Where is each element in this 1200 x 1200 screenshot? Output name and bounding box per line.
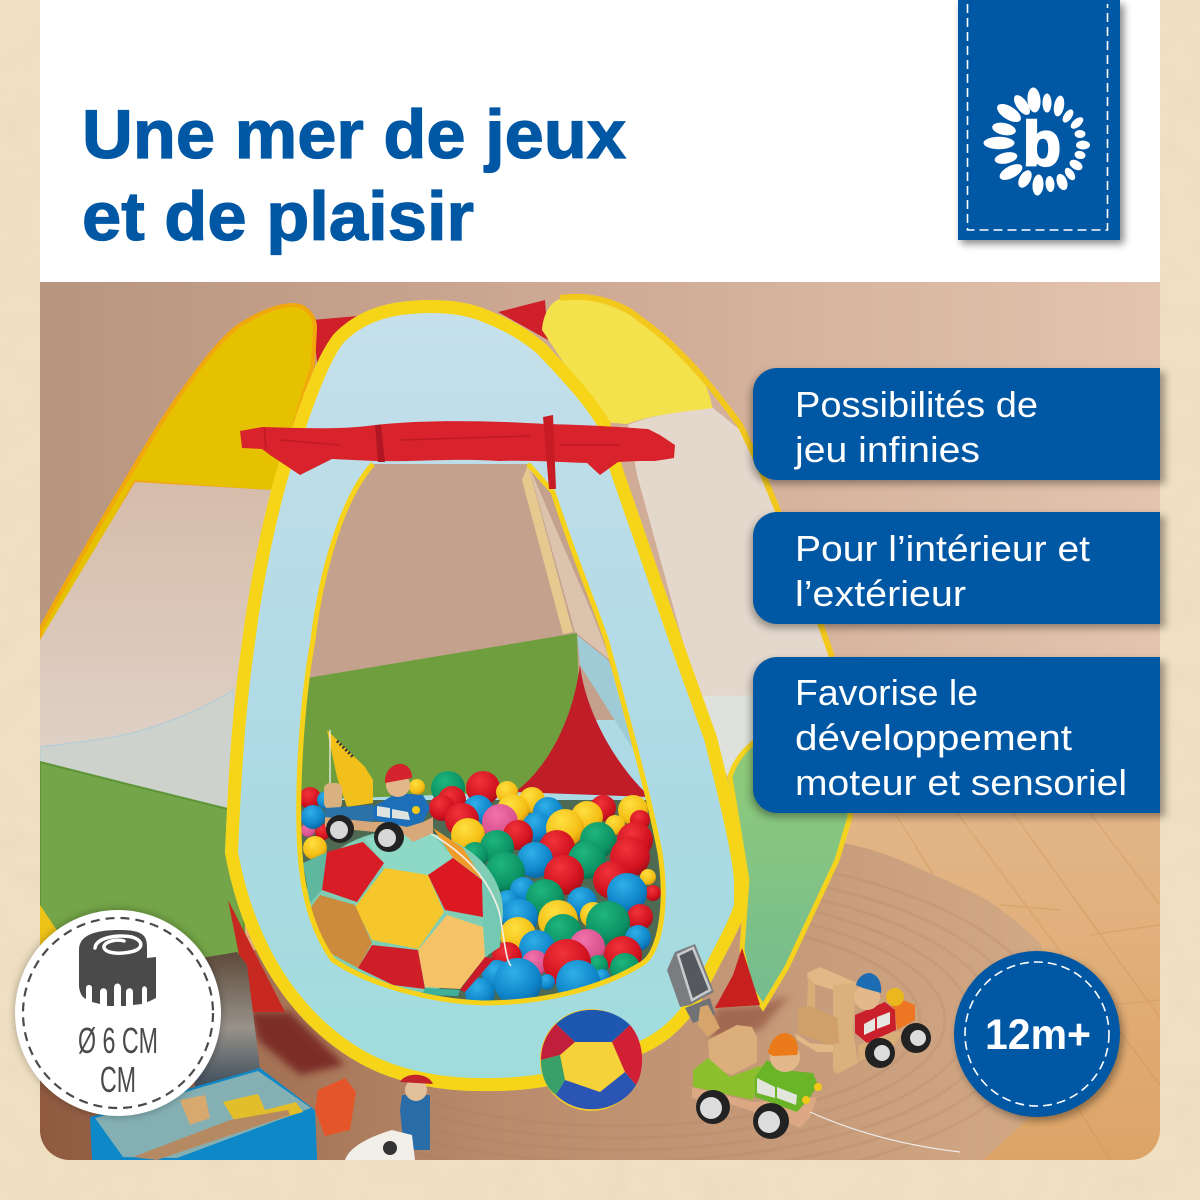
left green wall [40, 762, 245, 960]
ball pit [295, 771, 670, 1008]
right green wall [730, 743, 850, 1007]
diameter text: Ø 6 CM [78, 1020, 158, 1061]
flap strap [543, 415, 556, 489]
right mesh panel [628, 408, 829, 776]
green back wall [295, 633, 582, 800]
brand tag with logo [958, 0, 1124, 244]
left yellow roof panel [40, 305, 315, 660]
red underside right [715, 948, 760, 1008]
crane truck toy [324, 730, 433, 852]
diameter text: CM [100, 1059, 136, 1100]
feature pill 3: moteur et sensoriel [795, 762, 1127, 803]
red underside left [228, 900, 285, 1012]
feature pill 1: jeu infinies [794, 429, 980, 470]
icon: tape measure [79, 930, 156, 1006]
excavator truck toy [667, 944, 960, 1152]
red roll-up door flap [240, 415, 675, 489]
feature pill 3 [751, 657, 1165, 817]
feature pill 3: développement [795, 717, 1072, 758]
wooden floor [40, 813, 1160, 1160]
wall [40, 282, 1160, 786]
tent front panel [225, 300, 747, 1091]
door yellow piping [299, 464, 663, 1003]
feature pill 2: l’extérieur [795, 573, 966, 614]
door opening interior [295, 460, 670, 1008]
feature pill 1 [751, 368, 1165, 484]
left lower mesh [40, 690, 240, 812]
open tin box [90, 952, 317, 1160]
icon: flower logo: b [1023, 110, 1061, 179]
left yellow hem [40, 905, 57, 946]
blue side wall [577, 635, 633, 749]
large soccer ball toy [303, 828, 511, 996]
red corner [515, 665, 650, 797]
forklift toy [795, 967, 931, 1074]
diameter text [78, 1020, 158, 1100]
jute rug [40, 844, 1042, 1160]
title: Une mer de jeux [82, 96, 626, 173]
tent back top [316, 300, 548, 362]
age badge [954, 951, 1123, 1121]
wooden farm figures [315, 1075, 433, 1160]
left mesh panel [40, 482, 272, 746]
right lower mesh [702, 696, 753, 774]
diameter badge [14, 909, 222, 1117]
back wall through door [310, 464, 614, 720]
photo: ball tent scene [40, 282, 1160, 1190]
feature pill 2 [751, 512, 1165, 628]
right yellow roof panel [542, 297, 713, 424]
feature pill 2: Pour l’intérieur et [795, 528, 1090, 569]
small plush ball [540, 1009, 642, 1111]
icon: flower logo [984, 87, 1090, 196]
feature pill 3: Favorise le [795, 672, 978, 713]
age badge: 12m+ [985, 1011, 1091, 1059]
title: et de plaisir [82, 178, 474, 255]
header band [40, 0, 1160, 282]
title [82, 96, 626, 255]
right tent rim [560, 297, 832, 657]
feature pill 1: Possibilités de [795, 384, 1038, 425]
